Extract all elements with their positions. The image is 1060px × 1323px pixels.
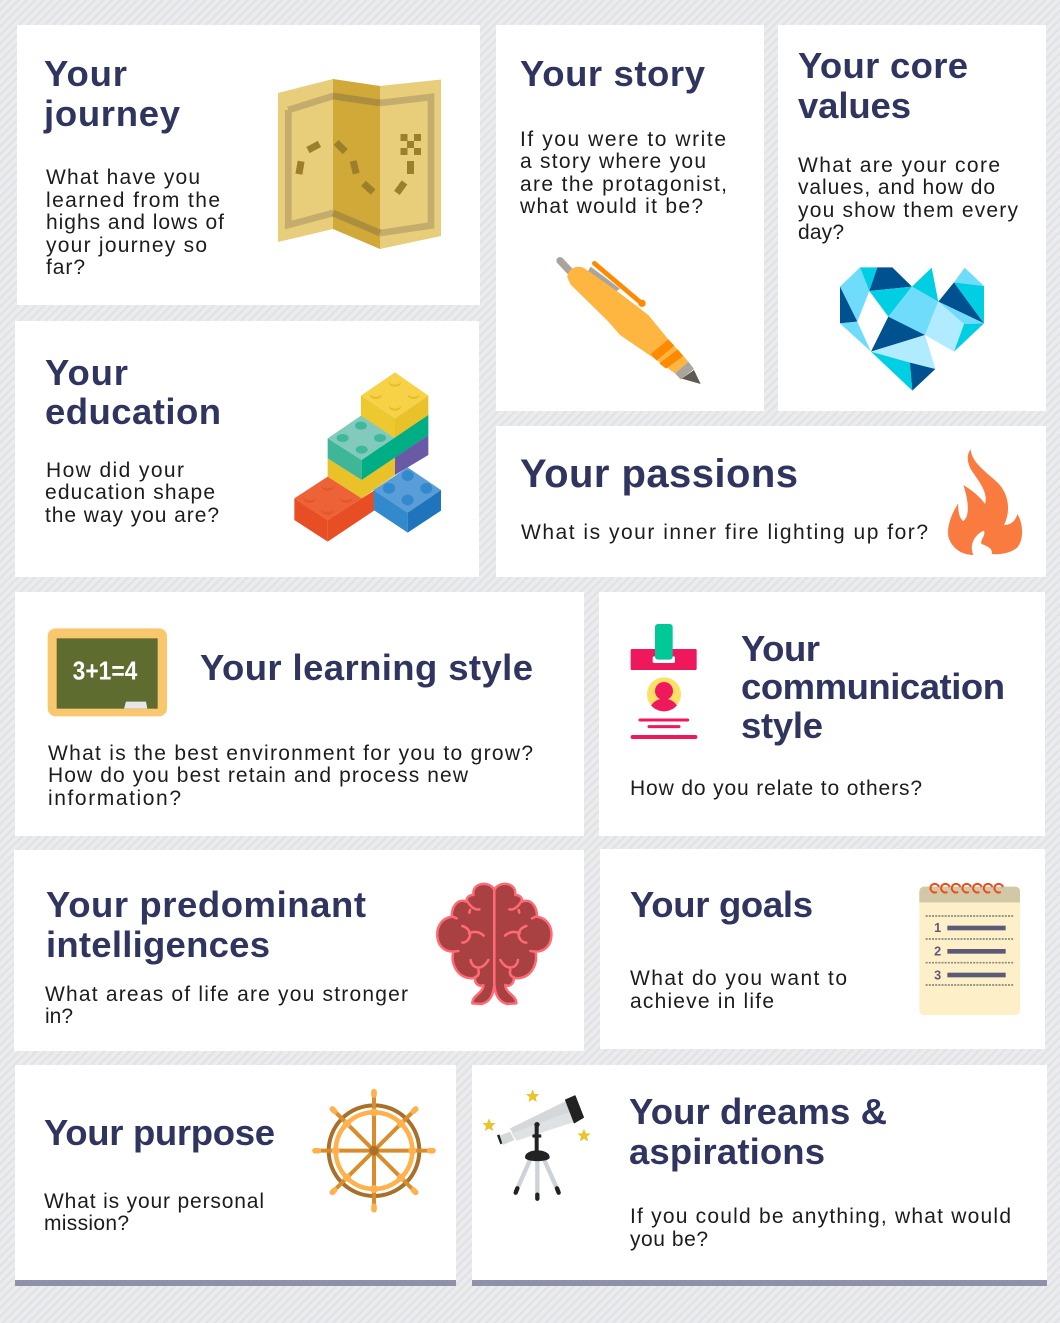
heading: your core values: Your core	[798, 45, 968, 86]
heading: your purpose: Your purpose	[44, 1112, 275, 1153]
icon: notepad	[919, 884, 1020, 1015]
text: journey question: your journey so	[46, 234, 207, 257]
text: story question: what would it be?	[519, 195, 703, 218]
heading: your journey: Your	[44, 53, 127, 94]
heading: your communication style	[741, 628, 1005, 746]
text: values question: day?	[798, 221, 844, 244]
text: purpose question	[44, 1190, 264, 1235]
text: intelligences question	[45, 983, 408, 1028]
text: values question: values, and how do	[798, 176, 995, 199]
heading: your predominant intelligences	[46, 884, 366, 965]
text: purpose question: mission?	[44, 1212, 129, 1235]
heading: your dreams and aspirations: Your dreams &	[629, 1091, 887, 1132]
panel: your dreams and aspirations	[472, 1065, 1047, 1286]
heading: your predominant intelligences: Your predominant	[46, 884, 366, 925]
panel: your communication style	[599, 592, 1045, 836]
text: journey question: highs and lows of	[46, 211, 224, 234]
heading: your goals: Your goals	[630, 884, 813, 925]
text: journey question: What have you	[46, 166, 200, 189]
heading: your education: Your	[45, 352, 128, 393]
text: learning question	[48, 742, 533, 810]
icon: toy bricks	[294, 372, 441, 542]
heading: your learning style: Your learning style	[200, 647, 533, 688]
text: values question: you show them every	[798, 199, 1018, 222]
icon: notepad: 3	[934, 968, 941, 982]
text: values question: What are your core	[798, 154, 1000, 177]
heading: your communication style: style	[741, 705, 823, 746]
icon: telescope	[482, 1089, 591, 1199]
text: journey question: learned from the	[46, 189, 220, 212]
text: communication question: How do you relate to others?	[630, 777, 922, 800]
heading: your predominant intelligences: intelligences	[46, 924, 270, 965]
text: education question	[45, 459, 219, 527]
heading: your story: Your story	[520, 53, 706, 94]
text: passions question: What is your inner fire lighting up for?	[521, 521, 928, 544]
text: dreams question: you be?	[630, 1228, 708, 1251]
panel: your story	[496, 25, 764, 411]
panel: your core values	[778, 25, 1046, 411]
panel: your purpose	[15, 1065, 456, 1286]
heading: your core values	[798, 45, 968, 126]
text: intelligences question: in?	[45, 1005, 73, 1028]
icon: ship wheel	[315, 1092, 433, 1210]
icon: notepad: 1	[934, 921, 941, 935]
icon: notepad: 2	[934, 945, 941, 959]
text: values question	[798, 154, 1018, 244]
heading: your core values: values	[798, 85, 911, 126]
text: education question: education shape	[45, 481, 215, 504]
text: journey question	[46, 166, 224, 279]
panel: your learning style	[15, 592, 584, 836]
heading: your journey: journey	[43, 93, 181, 134]
text: goals question: achieve in life	[630, 990, 774, 1013]
text: intelligences question: What areas of life are you stronger	[45, 983, 408, 1006]
text: story question: a story where you	[520, 150, 706, 173]
text: education question: the way you are?	[45, 504, 219, 527]
heading: your dreams and aspirations	[629, 1091, 887, 1172]
heading: your education	[45, 352, 221, 432]
text: story question: are the protagonist,	[520, 173, 727, 196]
panel: your predominant intelligences	[14, 850, 584, 1051]
text: education question: How did your	[46, 459, 184, 482]
icon: chalkboard: 3+1=4	[73, 655, 138, 685]
text: goals question: What do you want to	[630, 967, 847, 990]
text: story question: If you were to write	[520, 128, 726, 151]
text: journey question: far?	[46, 256, 85, 279]
heading: your communication style: communication	[741, 666, 1005, 707]
text: story question	[519, 128, 727, 218]
panel: your goals	[600, 849, 1045, 1049]
heading: your journey	[43, 53, 181, 134]
icon: chalkboard	[48, 628, 167, 716]
icon: pen	[560, 261, 701, 384]
text: purpose question: What is your personal	[44, 1190, 264, 1213]
icon: polygon heart	[840, 267, 984, 391]
icon: flame	[948, 449, 1022, 555]
heading: your passions: Your passions	[520, 452, 798, 496]
text: learning question: information?	[48, 787, 181, 810]
heading: your communication style: Your	[741, 628, 820, 669]
icon: treasure map	[278, 79, 441, 249]
icon: brain	[437, 884, 551, 1004]
heading: your education: education	[45, 391, 221, 432]
panel: your passions	[496, 426, 1046, 577]
panel: your education	[15, 321, 479, 577]
panel: your journey	[17, 25, 480, 305]
text: dreams question	[630, 1205, 1011, 1251]
text: learning question: What is the best environment for you to grow?	[48, 742, 533, 765]
text: dreams question: If you could be anything, what would	[630, 1205, 1011, 1228]
heading: your dreams and aspirations: aspirations	[629, 1131, 825, 1172]
icon: id badge	[631, 624, 697, 737]
text: goals question	[630, 967, 847, 1013]
text: learning question: How do you best retain and process new	[48, 764, 469, 787]
